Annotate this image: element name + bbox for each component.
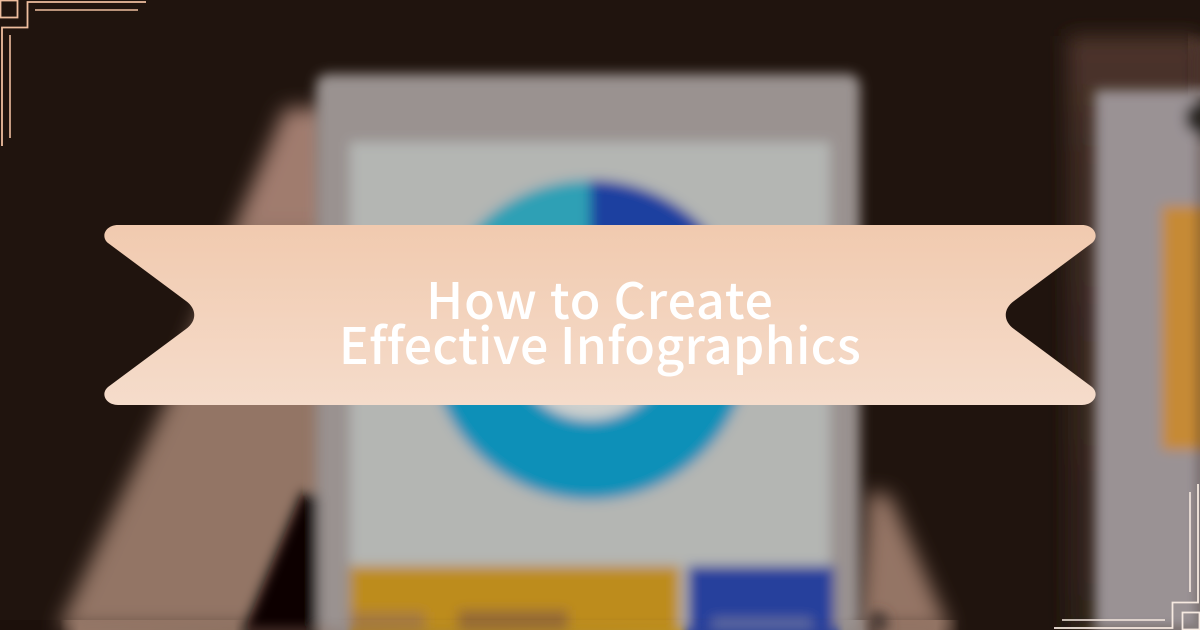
- decorative corner frame: bottom right: [1054, 484, 1200, 630]
- decorative corner frame: top left: [0, 0, 146, 146]
- title text: [339, 262, 861, 379]
- title text: How to Create: [426, 262, 774, 334]
- title text: Effective Infographics: [339, 307, 861, 379]
